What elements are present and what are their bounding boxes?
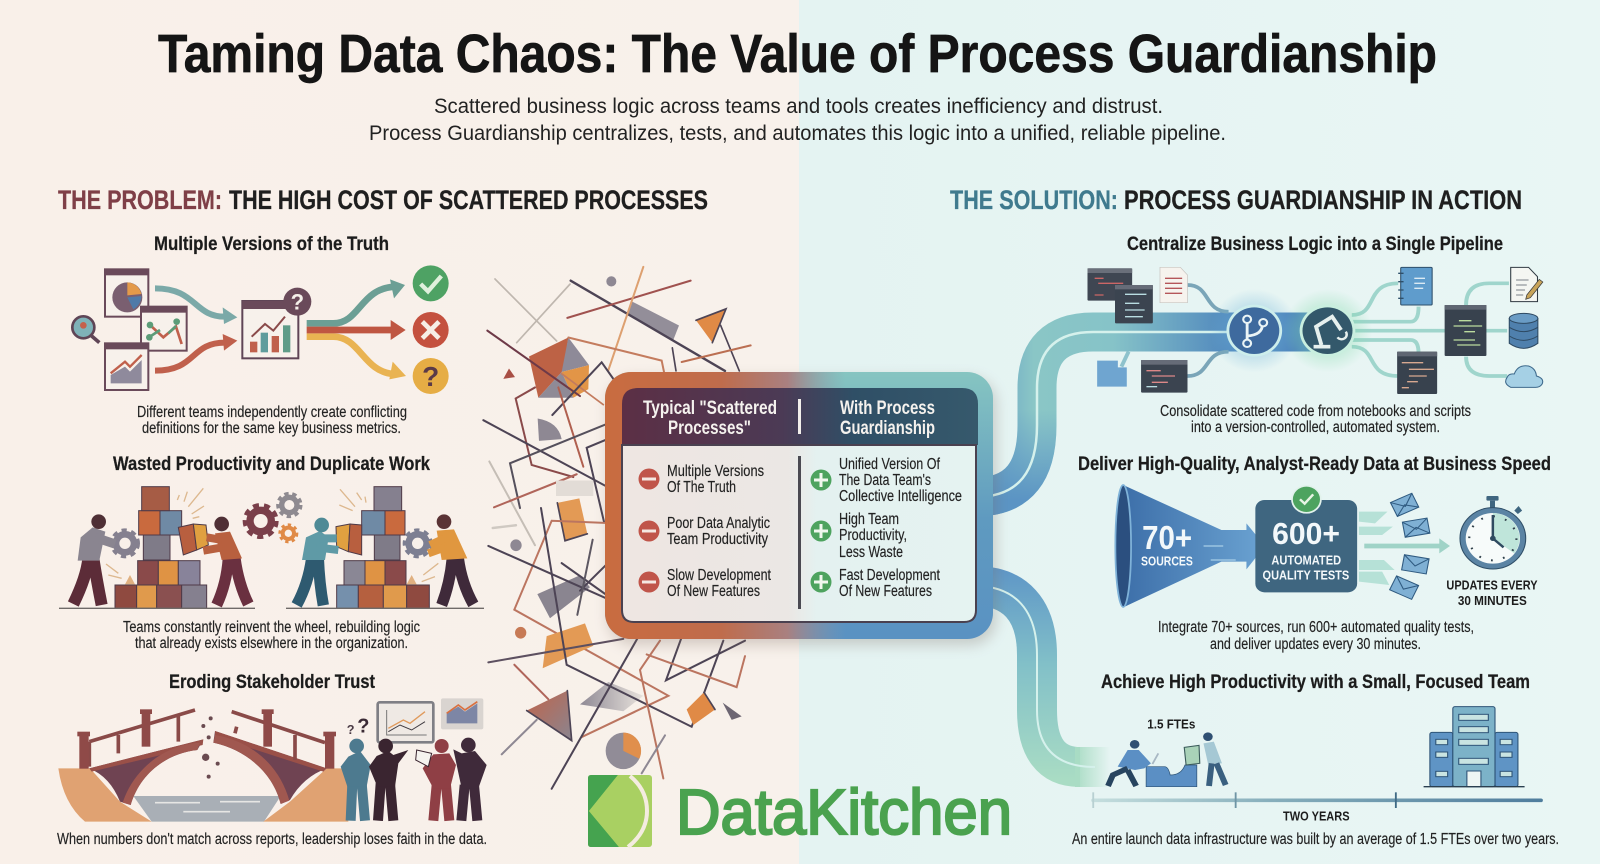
label: updates every 30 minutes: UPDATES EVERY [1446, 577, 1537, 592]
column: with process guardianship: Collective Intelligence [839, 488, 962, 505]
panel: eroding stakeholder trust [57, 672, 487, 848]
heading: the solution: THE SOLUTION: [950, 185, 1118, 215]
icon: git branch [1226, 305, 1282, 357]
stat: 600+ automated tests [1255, 485, 1357, 592]
text: deliver description: and deliver updates every 30 minutes. [1210, 636, 1421, 653]
stakeholder figures [341, 738, 487, 821]
subtitle [369, 95, 1226, 145]
icon: document and pencil [1511, 267, 1543, 302]
table header [622, 388, 978, 445]
heading: multiple versions: Multiple Versions of the Truth [154, 234, 389, 255]
icon: database [1509, 313, 1538, 348]
column: scattered processes: Poor Data Analytic [667, 515, 770, 532]
table body [622, 445, 976, 622]
fourth person [428, 514, 473, 605]
heading: centralize: Centralize Business Logic into a Single Pipeline [1127, 234, 1503, 255]
text: wasted productivity description [123, 619, 420, 652]
text: multiple versions description: Different teams independently create conflicting [137, 404, 407, 421]
heading: eroding trust: Eroding Stakeholder Trust [169, 672, 376, 693]
label: updates every 30 minutes [1446, 577, 1537, 608]
logo mark [588, 775, 652, 847]
column: with process guardianship: Productivity, [839, 527, 907, 544]
icon: stopwatch [1460, 496, 1526, 569]
panel: centralize business logic [1087, 234, 1543, 436]
icon: robot arm [1300, 305, 1355, 357]
icon: cloud [1506, 366, 1543, 387]
column: scattered processes: Multiple Versions [667, 463, 764, 480]
illustration: broken bridge and stakeholders: ? [357, 716, 369, 738]
text: wasted productivity description: Teams constantly reinvent the wheel, rebuilding logic [123, 619, 420, 636]
icon: funnel [1115, 485, 1265, 607]
pipeline: delivery and team flow [975, 586, 1110, 767]
stat: 70+ sources [1141, 520, 1193, 569]
illustration: teams rebuilding blocks [59, 487, 484, 608]
column: with process guardianship: Unified Version Of [839, 456, 941, 473]
heading: the solution: PROCESS GUARDIANSHIP IN ACTION [1124, 185, 1522, 215]
text: eroding trust description: When numbers don't match across reports, leadership loses faith in the data. [57, 831, 487, 848]
heading: the solution [950, 185, 1522, 215]
column: scattered processes: Team Productivity [667, 531, 768, 548]
illustration: conflicting dashboards: ? [291, 289, 304, 314]
icon: office building [1424, 707, 1525, 787]
pipeline: centralize flow [975, 332, 1320, 497]
text: centralize description: Consolidate scattered code from notebooks and scripts [1160, 403, 1471, 420]
heading: the problem [58, 185, 708, 215]
background: solution side [799, 0, 1600, 864]
heading: achieve: Achieve High Productivity with a Small, Focused Team [1101, 672, 1530, 693]
third person [297, 518, 338, 605]
text: deliver description [1158, 619, 1474, 653]
column: with process guardianship [810, 456, 962, 600]
table header: Guardianship [840, 418, 935, 439]
column: with process guardianship: The Data Team's [839, 472, 931, 489]
column: with process guardianship: Less Waste [839, 544, 903, 561]
panel: deliver high-quality data [1078, 454, 1551, 653]
illustration: broken bridge and stakeholders: ? [347, 723, 355, 737]
illustration: conflicting dashboards [72, 265, 449, 394]
stat: 600+ automated tests: AUTOMATED [1271, 552, 1341, 567]
column: with process guardianship: Of New Features [839, 583, 932, 600]
logo: DataKitchen [588, 775, 1012, 848]
logo wordmark: DataKitchen [676, 776, 1012, 848]
text: multiple versions description: definitions for the same key business metrics. [142, 420, 401, 437]
stat: 600+ automated tests: QUALITY TESTS [1262, 567, 1349, 582]
icon: document [1160, 267, 1187, 303]
panel: small focused team [1072, 672, 1559, 848]
comparison panel [605, 372, 996, 645]
stat: 70+ sources: SOURCES [1141, 553, 1193, 569]
illustration: conflicting dashboards: ? [422, 361, 439, 392]
illustration: pipeline [1087, 267, 1543, 394]
text: wasted productivity description: that already exists elsewhere in the organization. [135, 635, 408, 652]
icon: team building [1108, 732, 1226, 787]
stat: 70+ sources: 70+ [1142, 520, 1192, 557]
column: with process guardianship: High Team [839, 511, 899, 528]
title: Taming Data Chaos: The Value of Process Guardianship [158, 24, 1437, 84]
column: scattered processes: Slow Development [667, 567, 772, 584]
heading: wasted productivity: Wasted Productivity and Duplicate Work [113, 454, 430, 475]
label: 1.5 FTEs: 1.5 FTEs [1147, 717, 1195, 731]
subtitle: Process Guardianship centralizes, tests, and automates this logic into a unified, reliable pipeline. [369, 122, 1226, 145]
heading: the problem: THE HIGH COST OF SCATTERED PROCESSES [229, 185, 708, 215]
text: deliver description: Integrate 70+ sources, run 600+ automated quality tests, [1158, 619, 1474, 636]
column: with process guardianship: Fast Development [839, 567, 941, 584]
text: centralize description [1160, 403, 1471, 436]
timeline: TWO YEARS [1283, 808, 1350, 824]
column: scattered processes [638, 463, 772, 600]
table header: With Process [840, 398, 935, 419]
subtitle: Scattered business logic across teams and tools creates inefficiency and distrust. [434, 95, 1163, 118]
column: scattered processes: Of New Features [667, 583, 760, 600]
panel: multiple versions of the truth [72, 234, 449, 437]
icon: code windows [1087, 268, 1187, 393]
illustration: team and timeline [1093, 707, 1541, 824]
table header: Typical "Scattered [643, 398, 777, 419]
icon: folder [1097, 361, 1127, 387]
panel: wasted productivity [59, 454, 484, 652]
left person [73, 514, 115, 605]
second person [203, 517, 248, 605]
text: multiple versions description [137, 404, 407, 437]
icon: envelopes [1390, 493, 1430, 599]
background: problem side [0, 0, 799, 864]
stat: 600+ automated tests: 600+ [1272, 516, 1340, 551]
column: scattered processes: Of The Truth [667, 479, 736, 496]
scattered lines and shapes [483, 267, 751, 789]
table header: Processes" [668, 418, 751, 439]
icon: notebook [1398, 267, 1432, 305]
label: updates every 30 minutes: 30 MINUTES [1458, 592, 1527, 608]
text: centralize description: into a version-controlled, automated system. [1191, 419, 1440, 436]
icon: code editors [1397, 305, 1486, 394]
heading: the problem: THE PROBLEM: [58, 185, 222, 215]
illustration: broken bridge and stakeholders [58, 698, 487, 822]
illustration: funnel to delivery [1115, 485, 1537, 608]
